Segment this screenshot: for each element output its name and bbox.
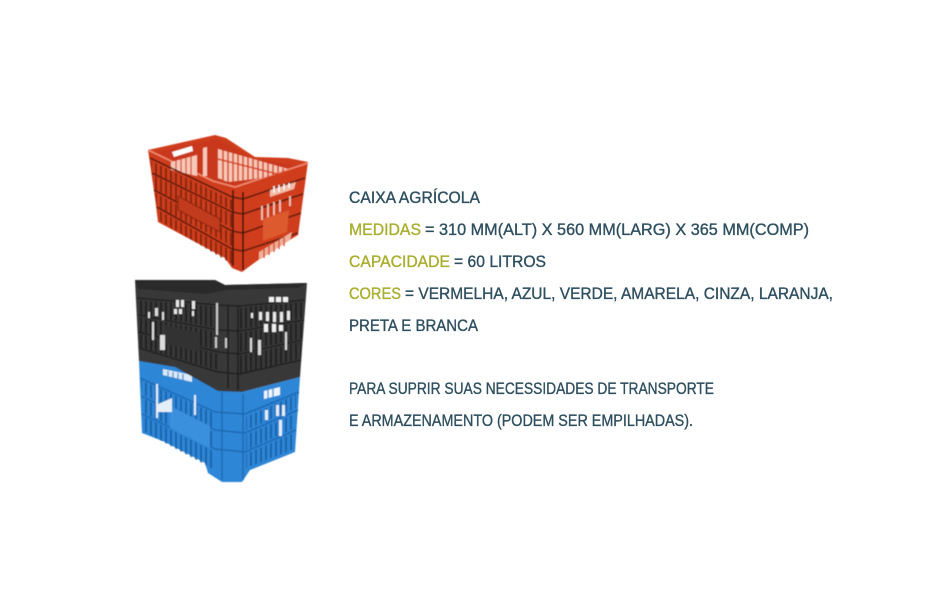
icon: red crate: [148, 135, 308, 272]
text: capacidade: = 60 LITROS: [454, 253, 546, 271]
text: description: [349, 380, 714, 430]
text: medidas: MEDIDAS: [349, 221, 421, 239]
icon: stacked crates: [135, 280, 307, 482]
text: capacidade: CAPACIDADE: [349, 253, 450, 271]
text: cores: = VERMELHA, AZUL, VERDE, AMARELA, CINZA, LARANJA,: [405, 285, 833, 303]
text: cores: PRETA E BRANCA: [349, 317, 478, 335]
icon: black crate: [135, 280, 307, 392]
text: capacidade: [349, 253, 546, 271]
text: description: E ARMAZENAMENTO (PODEM SER EMPILHADAS).: [349, 412, 693, 430]
text: cores: [349, 285, 833, 335]
text: description: PARA SUPRIR SUAS NECESSIDADES DE TRANSPORTE: [349, 380, 714, 398]
text: cores: CORES: [349, 285, 401, 303]
left face slats: [151, 161, 232, 264]
heading: caixa agrícola: CAIXA AGRÍCOLA: [349, 188, 480, 207]
icon: blue crate: [139, 361, 300, 482]
text: medidas: = 310 MM(ALT) X 560 MM(LARG) X 365 MM(COMP): [425, 221, 809, 239]
